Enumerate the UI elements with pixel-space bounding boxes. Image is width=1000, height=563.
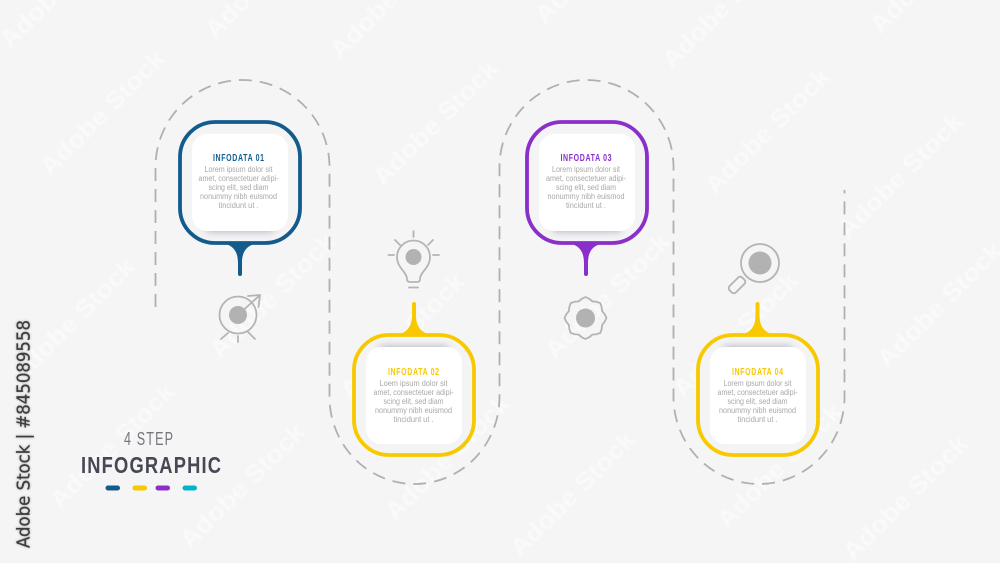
panel: step 1 — [180, 122, 300, 276]
step 2 heading: INFODATA 02 — [388, 366, 439, 377]
watermark pattern: Adobe Stock — [174, 418, 311, 554]
step 4 text: scing elit, sed diam — [728, 397, 788, 406]
watermark pattern: Adobe Stock — [539, 228, 676, 364]
stock id side label: Adobe Stock | #845089558 — [14, 320, 34, 548]
step 1 text: Lorem ipsum dolor sit — [204, 165, 273, 174]
step 4 shadow — [724, 338, 792, 348]
watermark pattern: Adobe Stock — [204, 228, 341, 364]
panel: step 4 — [698, 302, 818, 455]
watermark pattern: Adobe Stock — [334, 268, 471, 404]
watermark pattern: Adobe Stock — [44, 378, 181, 514]
step 4 text — [718, 379, 798, 424]
step 1 shadow — [206, 230, 274, 240]
icon: target with arrow — [220, 295, 260, 342]
watermark pattern: Adobe Stock — [4, 253, 141, 389]
step 4 text: Lorem ipsum dolor sit — [724, 379, 792, 388]
dashed connector path — [156, 80, 844, 484]
title: infographic: INFOGRAPHIC — [81, 453, 221, 479]
step 3 text: Lorem ipsum dolor sit — [552, 165, 621, 174]
step 1 pointer — [222, 243, 258, 276]
step 4 text: amet, consectetuer adipi- — [718, 388, 798, 397]
step 4 text: nonummy nibh euismod — [719, 406, 796, 415]
step 1 text: tincidunt ut . — [218, 201, 258, 210]
watermark pattern: Adobe Stock — [837, 430, 974, 563]
step 3 text: scing elit, sed diam — [556, 183, 616, 192]
step 2 frame — [354, 335, 474, 455]
step 3 text — [546, 165, 626, 210]
step 4 heading: INFODATA 04 — [732, 366, 783, 377]
watermark pattern: Adobe Stock — [34, 45, 171, 181]
step 3 shadow — [553, 230, 621, 240]
step 3 white card — [539, 134, 635, 231]
watermark pattern: Adobe Stock — [667, 267, 804, 403]
step 2 text — [374, 379, 454, 424]
step 1 text: amet, consectetuer adipi- — [198, 174, 279, 183]
panel: step 3 — [527, 122, 647, 276]
step 4 text: tincidunt ut . — [738, 415, 778, 424]
title block — [81, 430, 221, 490]
step 3 heading: INFODATA 03 — [560, 152, 612, 163]
step 3 frame — [527, 122, 647, 243]
step 4 pointer — [740, 302, 776, 335]
step 2 text: Loem ipsum dolor sit — [380, 379, 448, 388]
step 1 frame — [180, 122, 300, 243]
watermark pattern: Adobe Stock — [711, 398, 848, 534]
step 3 pointer — [568, 243, 604, 276]
watermark pattern: Adobe Stock — [699, 63, 836, 199]
title: 4 step: 4 STEP — [124, 430, 173, 450]
step 2 shadow — [380, 338, 448, 348]
step 2 text: amet, consectetuer adipi- — [374, 388, 454, 397]
step 2 text: nonummy nibh euismod — [375, 406, 452, 415]
step 2 text: tincidunt ut . — [394, 415, 434, 424]
step 3 text: tincidunt ut . — [566, 201, 606, 210]
step 1 text: scing elit, sed diam — [208, 183, 268, 192]
step 1 text: nonummy nibh euismod — [200, 192, 277, 201]
icon: gear — [564, 297, 606, 339]
step 3 text: nonummy nibh euismod — [548, 192, 624, 201]
watermark pattern: Adobe Stock — [871, 237, 1000, 373]
step 1 text — [198, 165, 279, 210]
icon: light bulb — [388, 231, 439, 288]
step 4 white card — [710, 347, 806, 444]
watermark pattern: Adobe Stock — [504, 426, 641, 562]
step 1 white card — [192, 134, 288, 231]
watermark pattern: Adobe Stock — [379, 390, 516, 526]
step 2 white card — [366, 347, 462, 444]
watermark pattern: Adobe Stock — [367, 55, 504, 191]
icon: magnifier — [727, 244, 779, 295]
watermark pattern: Adobe Stock — [832, 108, 969, 244]
step 2 pointer — [396, 302, 432, 335]
panel: step 2 — [354, 302, 474, 455]
step 4 frame — [698, 335, 818, 455]
step 3 text: amet, consectetuer adipi- — [546, 174, 626, 183]
legend colour dashes — [106, 486, 197, 490]
step 1 heading: INFODATA 01 — [213, 152, 264, 163]
step 2 text: scing elit, sed diam — [384, 397, 444, 406]
